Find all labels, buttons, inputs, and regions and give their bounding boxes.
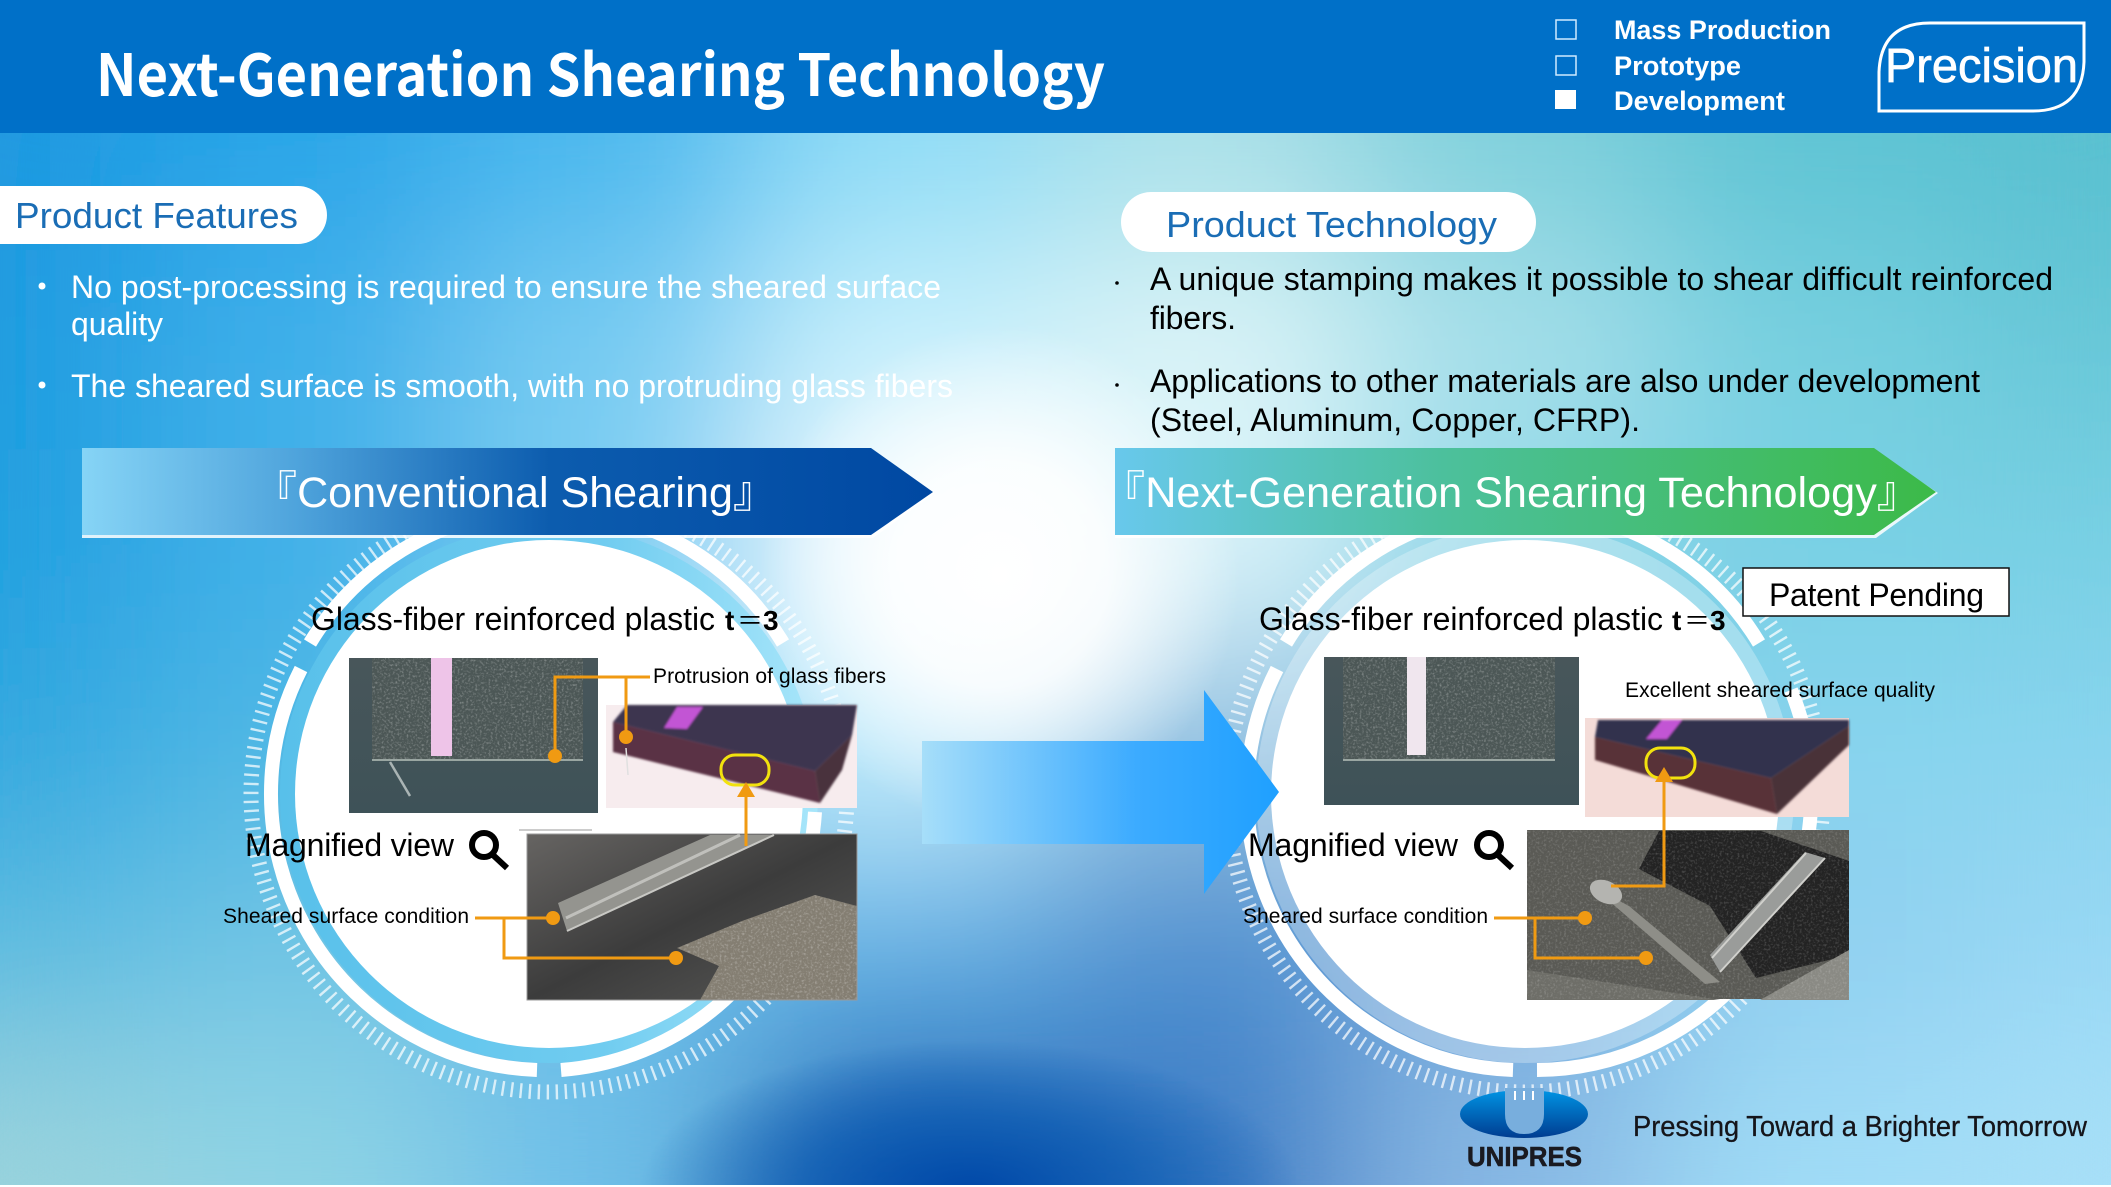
technology bullets: (Steel, Aluminum, Copper, CFRP). xyxy=(1150,402,1640,438)
header bar xyxy=(0,0,2111,133)
panel: product features xyxy=(0,186,953,404)
banner arrow: next-generation shearing: 『Next-Generation Shearing Technology』 xyxy=(1102,469,1920,517)
material label: next-generation: ＝ xyxy=(1684,606,1710,636)
yellow highlight and arrow: next-generation xyxy=(1611,748,1695,886)
logo: unipres: UNIPRES xyxy=(1467,1141,1582,1172)
photo: conventional magnified fibers xyxy=(519,830,857,1000)
photo: next-generation angled view xyxy=(1585,718,1849,817)
callout: protrusion of glass fibers xyxy=(548,665,886,763)
circle diagram: conventional xyxy=(251,496,847,1092)
material label: conventional: Glass-fiber reinforced plastic xyxy=(311,601,715,637)
circle diagram: next-generation xyxy=(1227,496,1823,1092)
yellow highlight and arrow: conventional xyxy=(721,755,769,846)
material label: next-generation: Glass-fiber reinforced plastic xyxy=(1259,601,1663,637)
technology bullets xyxy=(1115,261,2053,438)
banner arrow: next-generation shearing xyxy=(1102,448,1938,538)
feature bullets: quality xyxy=(71,306,163,342)
feature bullets xyxy=(38,269,953,404)
banner arrow: conventional shearing: 『Conventional Shearing』 xyxy=(254,469,776,517)
patent pending tag xyxy=(1743,568,2009,616)
heading pill: product features: Product Features xyxy=(15,195,298,236)
material label: next-generation: 3 xyxy=(1710,605,1726,636)
callout: sheared surface condition, conventional xyxy=(223,905,683,965)
photo: conventional top view xyxy=(349,658,598,813)
material label: conventional: 3 xyxy=(763,605,779,636)
big arrow between panels xyxy=(922,690,1279,894)
callout: sheared surface condition, conventional: Sheared surface condition xyxy=(223,905,469,928)
material label: next-generation: t xyxy=(1672,605,1681,636)
feature bullets: No post-processing is required to ensure the sheared surface xyxy=(71,269,941,305)
status checklist: Mass Production xyxy=(1614,15,1831,45)
heading pill: product technology: Product Technology xyxy=(1166,204,1497,245)
feature bullets: The sheared surface is smooth, with no protruding glass fibers xyxy=(71,368,953,404)
photo: next-generation top view xyxy=(1324,657,1579,805)
material label: conventional: ＝ xyxy=(737,606,763,636)
technology bullets: A unique stamping makes it possible to shear difficult reinforced xyxy=(1150,261,2053,297)
status checklist: Prototype xyxy=(1614,51,1741,81)
patent pending tag: Patent Pending xyxy=(1769,577,1984,613)
heading pill: product features xyxy=(0,186,327,244)
callout: sheared surface condition, next-generation: Sheared surface condition xyxy=(1243,905,1488,928)
magnified view label: next-generation: Magnified view xyxy=(1248,827,1459,863)
logo: unipres xyxy=(1460,1088,1588,1172)
precision badge: Precision xyxy=(1885,40,2078,93)
title: Next-Generation Shearing Technology xyxy=(96,29,1105,113)
heading pill: product technology xyxy=(1121,192,1536,252)
material label: conventional: t xyxy=(725,605,734,636)
photo: conventional angled view xyxy=(606,705,857,808)
technology bullets: Applications to other materials are also under development xyxy=(1150,363,1980,399)
technology bullets: fibers. xyxy=(1150,300,1236,336)
photo: next-generation magnified fibers xyxy=(1527,830,1849,1000)
precision badge xyxy=(1879,23,2084,111)
status checklist xyxy=(1555,15,1831,116)
text: excellent sheared surface quality: Excellent sheared surface quality xyxy=(1625,679,1936,702)
magnified view label: next-generation xyxy=(1248,827,1512,868)
magnified view label: conventional: Magnified view xyxy=(245,827,455,863)
status checklist: Development xyxy=(1614,86,1785,116)
tagline: Pressing Toward a Brighter Tomorrow xyxy=(1633,1111,2088,1143)
callout: protrusion of glass fibers: Protrusion of glass fibers xyxy=(653,665,886,688)
callout: sheared surface condition, next-generation xyxy=(1243,905,1653,965)
panel: product technology xyxy=(1115,192,2053,438)
banner arrow: conventional shearing xyxy=(82,448,935,538)
